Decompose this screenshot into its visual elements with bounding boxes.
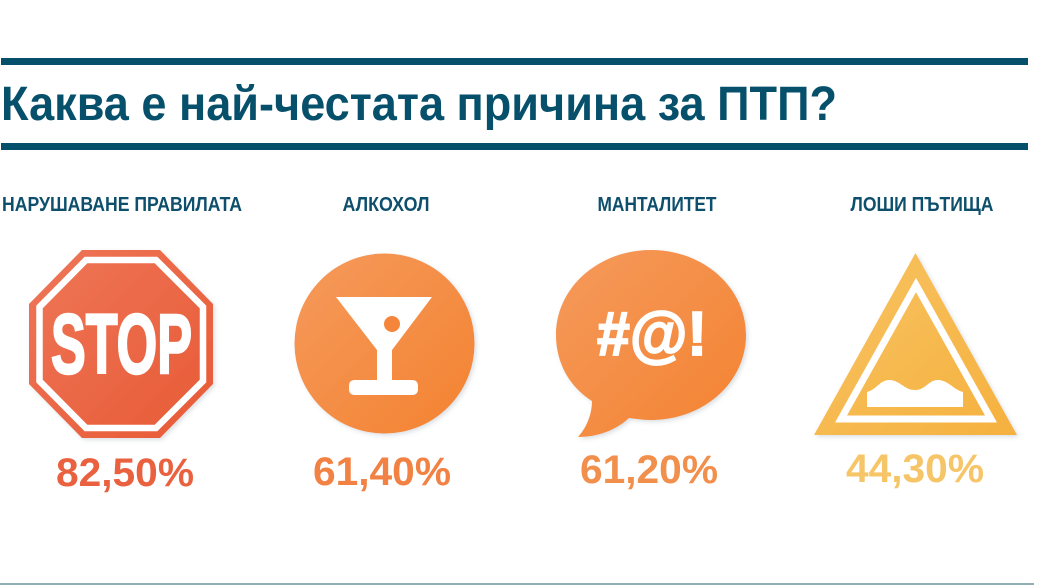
column: bad roads [814, 194, 1017, 491]
value: 82,50%: 82,50% [56, 451, 194, 495]
footer rule [0, 583, 1034, 585]
label: mentality: МАНТАЛИТЕТ [598, 194, 716, 216]
icon: uneven road sign [814, 253, 1017, 435]
label: alcohol: АЛКОХОЛ [342, 194, 430, 216]
top rule [1, 58, 1028, 65]
value: 44,30%: 44,30% [846, 447, 984, 491]
icon: speech bubble: #@! [597, 300, 707, 369]
value: 61,40%: 61,40% [313, 450, 451, 494]
bottom title rule [1, 143, 1028, 150]
icon: stop sign: STOP [51, 297, 192, 391]
icon: stop sign [29, 250, 213, 438]
value: 61,20%: 61,20% [580, 448, 718, 492]
column: traffic violations [2, 194, 242, 495]
title: Каква е най-честата причина за ПТП? [1, 78, 837, 131]
column: alcohol [294, 194, 474, 494]
icon: speech bubble [556, 250, 746, 437]
column: mentality [556, 194, 746, 492]
icon: cocktail glass [294, 254, 474, 434]
label: bad roads: ЛОШИ ПЪТИЩА [850, 194, 994, 216]
label: violations: НАРУШАВАНЕ ПРАВИЛАТА [2, 194, 242, 216]
